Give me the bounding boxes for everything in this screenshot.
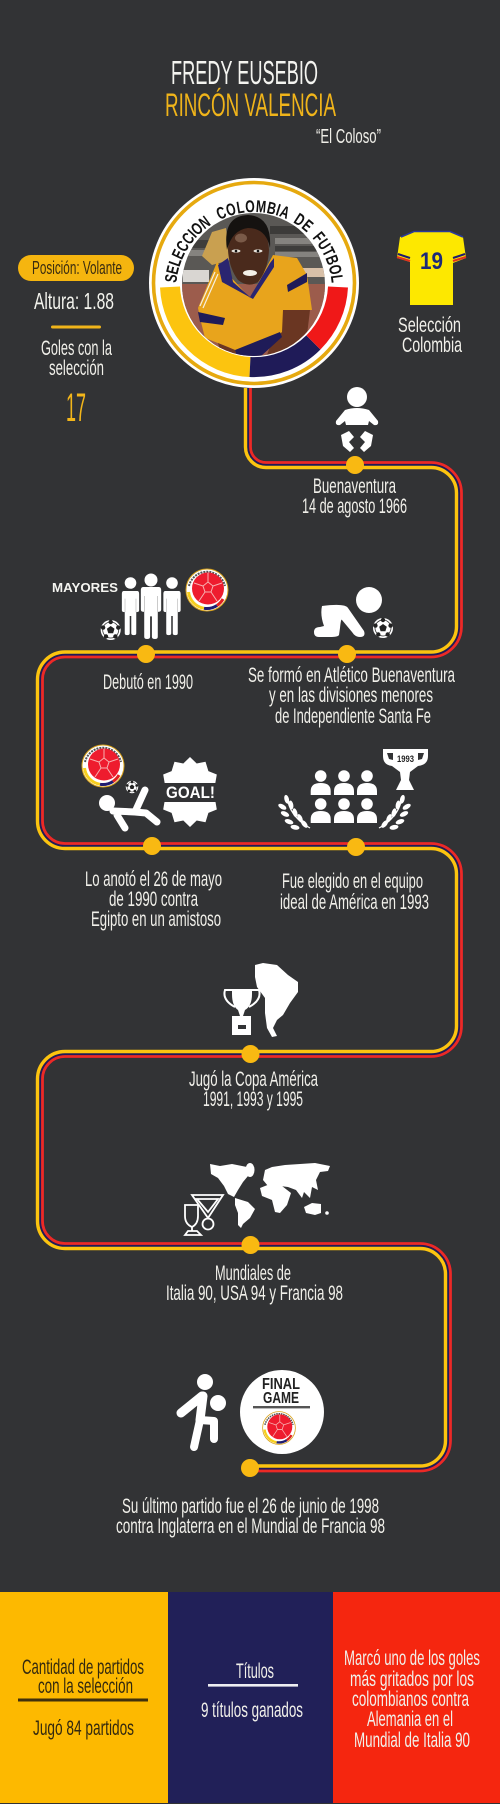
badge arc text: T	[318, 245, 337, 260]
three players	[122, 574, 181, 639]
icon: senior team	[52, 569, 228, 640]
world cups caption	[166, 1262, 343, 1305]
badge arc text: B	[321, 253, 341, 268]
nickname: “El Coloso”	[316, 126, 381, 148]
final divider	[253, 1406, 310, 1408]
badge arc text: N	[196, 213, 214, 233]
birth caption	[302, 475, 407, 518]
badge arc text: E	[298, 217, 316, 236]
jersey caption	[398, 314, 462, 357]
titles value: 9 títulos ganados	[201, 1699, 303, 1722]
badge arc text: F	[309, 229, 327, 246]
badge arc text: O	[324, 263, 344, 277]
icon: jersey	[397, 231, 466, 305]
goal burst	[159, 757, 221, 827]
final word: FINAL	[262, 1376, 300, 1393]
panel: player stats	[18, 255, 134, 430]
ball	[101, 620, 121, 640]
first goal caption: Egipto en un amistoso	[91, 908, 221, 931]
laurel right	[379, 794, 412, 830]
team seats	[311, 770, 377, 823]
icon: copa america	[224, 963, 298, 1037]
height: Altura: 1.88	[34, 288, 114, 314]
birth caption: 14 de agosto 1966	[302, 495, 407, 518]
matches value: Jugó 84 partidos	[33, 1717, 134, 1740]
icon: final game badge	[240, 1370, 324, 1454]
titles divider	[208, 1684, 298, 1687]
trophy handles	[224, 990, 260, 1007]
trophy	[383, 749, 428, 790]
badge arc text: M	[255, 198, 267, 217]
icon: cup and medal	[185, 1195, 223, 1235]
badge arc text: C	[173, 238, 194, 255]
jersey caption: Selección	[398, 314, 461, 337]
badge arc text: I	[185, 227, 201, 242]
icon: player with ball	[181, 1374, 226, 1447]
icon: baby	[336, 387, 378, 452]
icon: first goal	[82, 745, 223, 828]
south america map	[255, 963, 298, 1037]
ideal team caption	[280, 870, 429, 914]
position text: Posición: Volante	[32, 258, 122, 278]
badge arc text: E	[164, 264, 184, 276]
badge arc text: L	[326, 274, 345, 284]
trophy handles	[387, 753, 424, 760]
matches divider	[18, 1698, 148, 1702]
badge arc text: O	[224, 200, 238, 221]
stat divider	[51, 326, 101, 328]
crest	[263, 1412, 295, 1444]
position pill	[18, 255, 134, 281]
timeline path	[38, 388, 462, 1471]
copa america caption: 1991, 1993 y 1995	[203, 1088, 303, 1111]
badge arc text: L	[166, 256, 186, 269]
matches heading line 2: con la selección	[38, 1675, 133, 1698]
titles heading: Títulos	[236, 1660, 274, 1683]
badge arc text: E	[169, 247, 189, 262]
goals label line 2: selección	[49, 357, 104, 380]
world cups caption: Italia 90, USA 94 y Francia 98	[166, 1282, 343, 1305]
surname: RINCÓN VALENCIA	[165, 87, 336, 123]
badge tricolor band	[170, 287, 338, 367]
player bicycle kick	[99, 790, 157, 828]
title	[165, 54, 381, 148]
badge arc text: D	[290, 211, 308, 231]
icon: world map	[210, 1163, 330, 1228]
badge rings	[149, 178, 359, 388]
crest	[82, 745, 124, 787]
panel: matches	[0, 1592, 168, 1803]
timeline dots	[137, 456, 365, 1477]
last match caption	[116, 1495, 385, 1538]
first goal caption: de 1990 contra	[109, 888, 198, 911]
panel: player stats: 17	[66, 386, 86, 430]
badge arc text: C	[214, 204, 229, 224]
ball	[126, 781, 138, 793]
jersey caption: Colombia	[402, 334, 462, 357]
trophy plate	[238, 1025, 246, 1029]
copa america caption: Jugó la Copa América	[189, 1068, 318, 1091]
matches heading: Cantidad de partidos	[22, 1656, 144, 1679]
badge arc text: O	[188, 220, 208, 239]
panel: famous goal	[333, 1592, 500, 1803]
goal word: GOAL!	[166, 783, 215, 802]
icon: crawling child with ball	[314, 587, 393, 638]
crest	[186, 569, 228, 611]
copa america caption	[189, 1068, 318, 1111]
first name: FREDY EUSEBIO	[171, 54, 318, 91]
famous goal text	[344, 1647, 480, 1752]
first goal caption: Lo anotó el 26 de mayo	[85, 868, 222, 891]
goals label: Goles con la	[41, 337, 112, 360]
badge with player photo	[149, 178, 359, 388]
badge arc text: O	[245, 198, 255, 217]
birth caption: Buenaventura	[313, 475, 396, 498]
goal band	[157, 783, 223, 802]
badge arc text	[163, 198, 345, 284]
first goal caption	[85, 868, 222, 931]
debut caption: Debutó en 1990	[103, 671, 193, 694]
badge arc text: L	[235, 199, 246, 218]
training caption	[248, 664, 455, 728]
laurel left	[277, 794, 310, 830]
panel: titles	[168, 1592, 333, 1803]
game word: GAME	[263, 1390, 299, 1407]
badge arc text: S	[163, 273, 182, 284]
icon: ideal team with trophy	[277, 749, 428, 830]
player photo	[180, 210, 330, 360]
badge arc text: I	[274, 202, 282, 220]
badge arc text: B	[265, 199, 278, 219]
badge arc text: A	[277, 203, 292, 223]
jersey number: 19	[420, 248, 443, 275]
label mayores: MAYORES	[52, 581, 118, 595]
trophy year: 1993	[397, 754, 414, 764]
badge arc text: U	[313, 236, 333, 254]
world cups caption: Mundiales de	[215, 1262, 291, 1285]
badge arc text: C	[179, 230, 199, 248]
trophy	[232, 989, 252, 1035]
